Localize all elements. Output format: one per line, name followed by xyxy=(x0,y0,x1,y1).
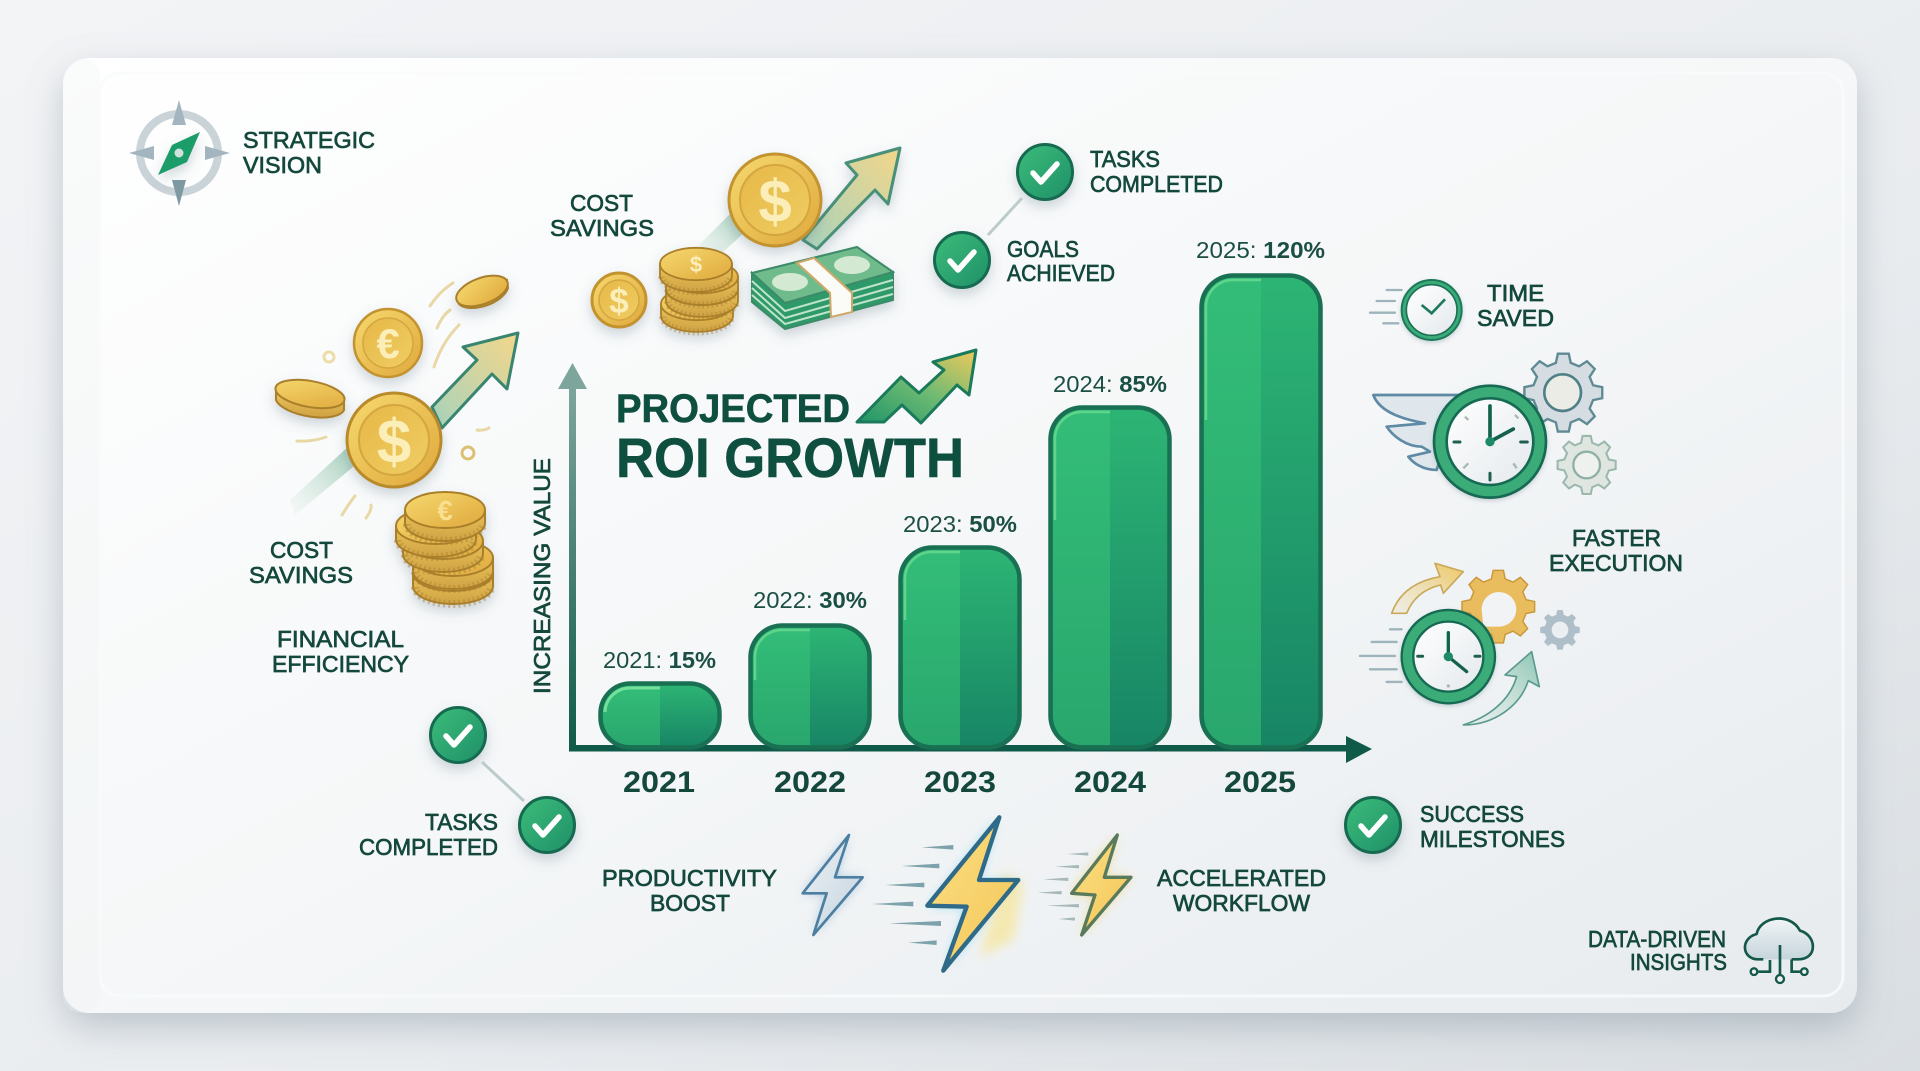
label: strategic vision: STRATEGIC xyxy=(243,127,375,153)
icon: time saved clock xyxy=(1370,280,1462,340)
label: goals achieved: ACHIEVED xyxy=(1007,260,1115,286)
label: data-driven insights xyxy=(1588,926,1727,975)
label: financial efficiency: EFFICIENCY xyxy=(272,651,409,677)
value labels: 2025: 120% xyxy=(1196,237,1325,263)
icon: flying coins and arrow left xyxy=(273,270,518,604)
icon: check goals achieved xyxy=(934,232,990,288)
year labels: 2022 xyxy=(774,766,846,799)
icon: title trend arrow xyxy=(857,350,976,423)
label: financial efficiency xyxy=(272,626,409,677)
label: tasks completed lower xyxy=(359,809,498,860)
label: cost savings left: COST xyxy=(270,537,333,563)
label: success milestones: MILESTONES xyxy=(1420,826,1565,852)
bar 2023 xyxy=(900,548,1020,748)
value labels: 2021: 15% xyxy=(603,647,716,673)
value labels: 2024: 85% xyxy=(1053,371,1167,397)
icon: strategic vision compass xyxy=(129,100,230,206)
label: time saved: TIME xyxy=(1487,280,1544,306)
label: accelerated workflow: WORKFLOW xyxy=(1173,890,1311,916)
label: financial efficiency: FINANCIAL xyxy=(277,626,404,652)
label: goals achieved xyxy=(1007,236,1115,286)
bar 2021 xyxy=(600,684,720,748)
label: tasks completed lower: TASKS xyxy=(425,809,498,835)
y axis arrow xyxy=(558,363,587,751)
label: time saved xyxy=(1477,280,1554,331)
label: accelerated workflow: ACCELERATED xyxy=(1157,865,1326,891)
year labels: 2021 xyxy=(623,766,695,799)
label: faster execution xyxy=(1549,525,1683,576)
label: productivity boost xyxy=(602,865,777,916)
label: strategic vision xyxy=(243,127,375,178)
label: productivity boost: BOOST xyxy=(650,890,730,916)
icon: coins and cash growth xyxy=(592,148,900,332)
label: accelerated workflow xyxy=(1157,865,1326,916)
label: tasks completed lower: COMPLETED xyxy=(359,834,498,860)
label: faster execution: FASTER xyxy=(1572,525,1661,551)
icon: coins and cash growth: $ xyxy=(690,252,702,277)
icon: flying coins and arrow left: $ xyxy=(377,408,411,477)
label: cost savings top xyxy=(550,190,654,241)
icon: flying coins and arrow left: € xyxy=(376,320,400,367)
connector xyxy=(482,762,524,801)
connector xyxy=(988,198,1022,235)
label: cost savings left: SAVINGS xyxy=(249,562,353,588)
icon: check tasks completed lower xyxy=(520,798,574,852)
icon: check tasks completed top xyxy=(1018,144,1072,200)
label: goals achieved: GOALS xyxy=(1007,236,1079,262)
bar 2022 xyxy=(750,626,870,748)
label: tasks completed top: TASKS xyxy=(1090,146,1160,172)
label: data-driven insights: INSIGHTS xyxy=(1630,949,1727,975)
icon: lightning bolts xyxy=(803,817,1131,971)
year labels: 2023 xyxy=(924,766,996,799)
value labels: 2022: 30% xyxy=(753,587,867,613)
label: cost savings top: SAVINGS xyxy=(550,215,654,241)
x axis arrow xyxy=(569,736,1372,763)
title xyxy=(616,387,964,489)
year labels xyxy=(623,766,1296,799)
icon: faster execution clock and gears xyxy=(1360,563,1580,725)
label: data-driven insights: DATA-DRIVEN xyxy=(1588,926,1726,952)
value labels xyxy=(603,237,1325,673)
label: cost savings top: COST xyxy=(570,190,633,216)
icon: winged clock and gears xyxy=(1373,354,1616,498)
bar 2025 xyxy=(1202,276,1320,748)
label: tasks completed top: COMPLETED xyxy=(1090,171,1223,197)
label: faster execution: EXECUTION xyxy=(1549,550,1683,576)
bar chart xyxy=(600,237,1325,799)
icon: check lower-left upper xyxy=(430,708,486,762)
label: success milestones xyxy=(1420,801,1565,852)
y axis label: INCREASING VALUE xyxy=(529,458,555,694)
title: ROI GROWTH xyxy=(616,426,964,489)
icon: coins and cash growth: $ xyxy=(758,168,792,235)
label: tasks completed top xyxy=(1090,146,1223,197)
bar 2024 xyxy=(1050,408,1170,748)
title: PROJECTED xyxy=(616,387,850,431)
value labels: 2023: 50% xyxy=(903,511,1017,537)
label: cost savings left xyxy=(249,537,353,588)
icon: coins and cash growth: $ xyxy=(609,282,629,321)
icon: flying coins and arrow left: € xyxy=(437,495,453,526)
label: strategic vision: VISION xyxy=(243,152,322,178)
label: time saved: SAVED xyxy=(1477,305,1554,331)
icon: check success milestones xyxy=(1346,798,1400,852)
year labels: 2024 xyxy=(1074,766,1146,799)
icon: data cloud xyxy=(1745,919,1813,983)
year labels: 2025 xyxy=(1224,766,1296,799)
label: productivity boost: PRODUCTIVITY xyxy=(602,865,777,891)
label: success milestones: SUCCESS xyxy=(1420,801,1524,827)
